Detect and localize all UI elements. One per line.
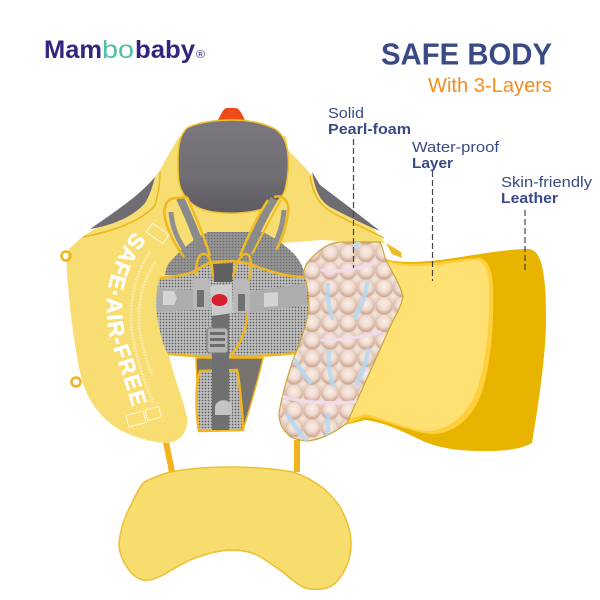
- yellow float shape: [67, 136, 385, 443]
- label: skin-friendly leather: Leather: [501, 190, 558, 207]
- red button: [212, 294, 228, 306]
- blue and pink channels: [284, 242, 380, 440]
- crotch clip: [215, 400, 232, 415]
- seat mesh upper: [165, 232, 305, 277]
- logo: baby: [135, 36, 195, 64]
- middle layer: [345, 258, 493, 434]
- lower buckle: [207, 328, 228, 353]
- chest strap tabs: [163, 291, 278, 307]
- dashed leader lines: [354, 139, 525, 281]
- crotch outer panel: [196, 358, 263, 431]
- safe air free lettering: [107, 231, 134, 414]
- label: water-proof layer: Water-proof: [412, 139, 500, 156]
- title: SAFE BODY: [381, 36, 552, 72]
- label: water-proof layer: [412, 139, 500, 172]
- safety marks: [126, 223, 169, 427]
- crotch inner mesh: [196, 370, 243, 431]
- right wing tab: [386, 243, 402, 258]
- outer leather layer: [345, 249, 546, 451]
- left shoulder piping: [83, 172, 160, 237]
- centre opening: [213, 263, 233, 282]
- chest strap: [157, 283, 308, 313]
- lower pad: [119, 467, 351, 589]
- label: pearl-foam: Pearl-foam: [328, 121, 411, 138]
- strap keepers: [196, 254, 251, 280]
- water-proof layer: [350, 260, 489, 431]
- left side loop: [62, 252, 70, 260]
- label: pearl-foam: Solid: [328, 105, 364, 122]
- product: float body: SAFE·AIR-FREE: [106, 233, 147, 406]
- subtitle: With 3-Layers: [428, 74, 552, 97]
- product: float body: [60, 119, 402, 443]
- layer cutaway: [279, 242, 546, 451]
- logo: Mam: [44, 36, 102, 64]
- left shoulder strap: [164, 197, 210, 257]
- seat mesh lower: [156, 261, 309, 357]
- label: pearl-foam: [328, 105, 411, 138]
- label: skin-friendly leather: Skin-friendly: [501, 174, 593, 191]
- right shoulder piping: [310, 176, 384, 238]
- logo: bo: [102, 36, 134, 64]
- headrest: [178, 120, 288, 213]
- logo: ®: [196, 49, 205, 61]
- label: skin-friendly leather: [501, 174, 593, 207]
- left shoulder patch: [90, 177, 155, 229]
- logo: [44, 36, 205, 64]
- right shoulder strap: [240, 196, 288, 256]
- attachment straps to lower pad: [166, 440, 297, 472]
- chest buckle: [193, 278, 250, 316]
- small print arcs: [131, 252, 155, 403]
- lower side loop: [72, 378, 80, 386]
- label: water-proof layer: Layer: [412, 155, 453, 172]
- pearl foam panel: [279, 242, 403, 441]
- icon: orange handle nub: [218, 108, 245, 120]
- centre strap: [212, 312, 229, 430]
- right shoulder patch: [312, 172, 380, 231]
- seat seams: [160, 261, 305, 357]
